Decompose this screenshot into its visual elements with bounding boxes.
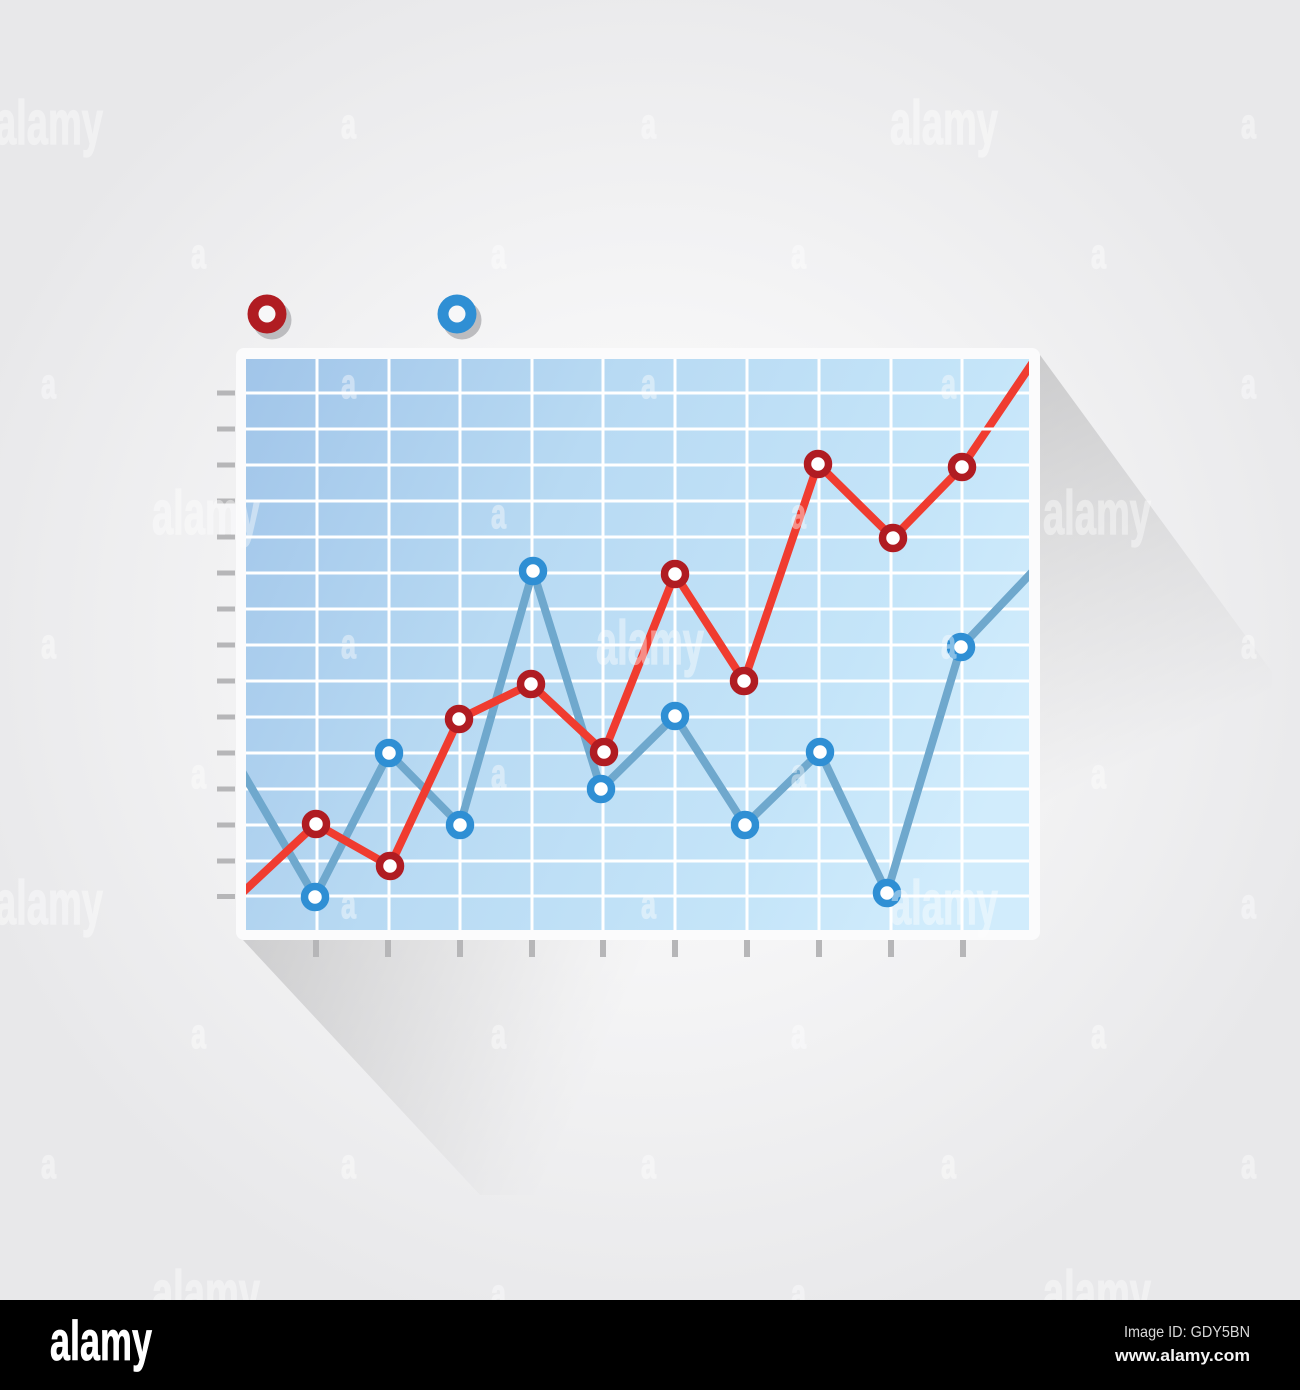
blue data markers — [304, 560, 972, 908]
watermark: alamy repeated: alamy — [0, 89, 103, 158]
chart plot area with grid — [246, 359, 1029, 930]
watermark: alamy repeated: a — [791, 490, 806, 537]
watermark: alamy repeated: a — [341, 880, 356, 927]
watermark: alamy repeated: a — [41, 620, 56, 667]
watermark: alamy repeated: a — [1241, 1140, 1256, 1187]
website: www.alamy.com — [1114, 1346, 1250, 1365]
axis ticks: left — [217, 390, 235, 899]
watermark: alamy repeated: a — [1241, 620, 1256, 667]
watermark: alamy repeated: alamy — [0, 869, 103, 938]
legend marker: blue — [438, 294, 482, 340]
footer logo: alamy — [50, 1309, 152, 1372]
watermark: alamy repeated: a — [491, 1270, 506, 1317]
watermark: alamy repeated: a — [1241, 360, 1256, 407]
long shadow of chart panel — [243, 355, 1272, 1195]
watermark: alamy repeated: a — [791, 230, 806, 277]
watermark: alamy repeated: a — [641, 360, 656, 407]
watermark: alamy repeated: a — [491, 750, 506, 797]
watermark: alamy repeated: alamy — [1043, 1259, 1151, 1328]
watermark: alamy repeated: a — [1091, 230, 1106, 277]
watermark: alamy repeated: a — [191, 750, 206, 797]
watermark: alamy repeated: a — [191, 1010, 206, 1057]
watermark: alamy repeated: a — [341, 100, 356, 147]
legend marker: red — [248, 294, 292, 340]
watermark: alamy repeated: a — [941, 620, 956, 667]
watermark: alamy repeated: a — [1091, 750, 1106, 797]
watermark: alamy repeated: alamy — [890, 89, 998, 158]
watermark: alamy repeated: a — [791, 1270, 806, 1317]
panel: chart card — [236, 348, 1040, 940]
watermark: alamy repeated: alamy — [596, 609, 704, 678]
watermark: alamy repeated: a — [341, 360, 356, 407]
red data markers — [306, 454, 972, 876]
watermark: alamy repeated: a — [941, 360, 956, 407]
watermark: alamy repeated: alamy — [890, 869, 998, 938]
watermark: alamy repeated: a — [641, 1140, 656, 1187]
watermark: alamy repeated: a — [341, 1140, 356, 1187]
watermark: alamy repeated: a — [191, 230, 206, 277]
watermark: alamy repeated: a — [791, 1010, 806, 1057]
watermark: alamy repeated: a — [791, 750, 806, 797]
watermark: alamy repeated: alamy — [1043, 479, 1151, 548]
watermark: alamy repeated: a — [491, 1010, 506, 1057]
watermark: alamy repeated: a — [491, 490, 506, 537]
watermark: alamy repeated: a — [1091, 1010, 1106, 1057]
watermark: alamy repeated: a — [41, 1140, 56, 1187]
footer bar — [0, 1300, 1300, 1390]
watermark: alamy repeated: a — [1241, 880, 1256, 927]
watermark: alamy repeated: alamy — [152, 1259, 260, 1328]
watermark: alamy repeated: a — [341, 620, 356, 667]
image id: Image ID: GDY5BN — [1124, 1324, 1250, 1341]
watermark: alamy repeated: alamy — [152, 479, 260, 548]
watermark: alamy repeated: a — [41, 360, 56, 407]
red data line — [240, 359, 1035, 895]
watermark: alamy repeated: a — [641, 100, 656, 147]
watermark: alamy repeated: a — [491, 230, 506, 277]
watermark: alamy repeated: a — [641, 880, 656, 927]
blue data line — [240, 569, 1035, 897]
axis ticks: bottom — [313, 940, 966, 957]
watermark: alamy repeated: a — [941, 1140, 956, 1187]
watermark: alamy repeated: a — [1241, 100, 1256, 147]
